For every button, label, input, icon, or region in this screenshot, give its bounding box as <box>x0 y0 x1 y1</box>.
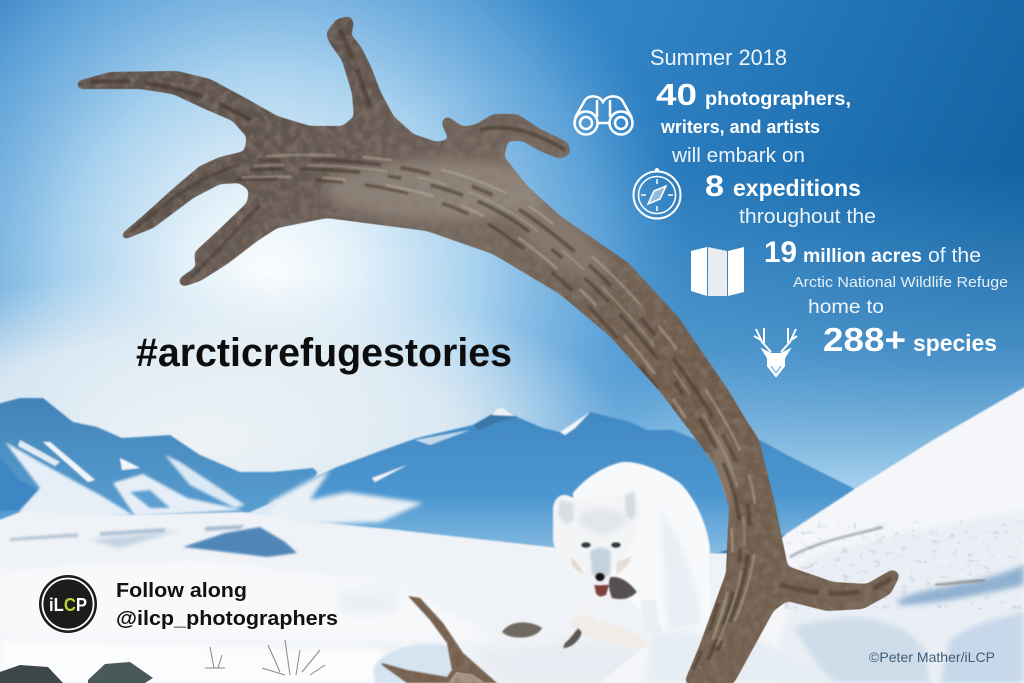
text: writers and artists: writers, and artists <box>660 117 820 137</box>
follow along text: @ilcp_photographers <box>116 608 338 630</box>
stat: 40 photographers: 40 <box>656 77 697 112</box>
stat: 19 million acres <box>764 236 981 269</box>
follow along text <box>116 580 338 630</box>
right snow slope <box>600 384 1024 683</box>
fox head <box>553 488 641 599</box>
icon: compass <box>634 168 680 218</box>
mountains on the left <box>0 398 340 522</box>
lower antler fragment <box>381 595 498 683</box>
stat: 8 expeditions <box>705 170 861 203</box>
stat: 40 photographers <box>656 77 851 112</box>
logo: iLCP badge: iLCP <box>49 595 87 615</box>
stat: 19 million acres: million acres <box>803 245 922 267</box>
follow along text: Follow along <box>116 580 247 602</box>
text: summer 2018: Summer 2018 <box>650 45 787 70</box>
text: throughout the: throughout the <box>739 206 876 228</box>
stat: 19 million acres: 19 <box>764 236 797 269</box>
arctic fox <box>502 462 711 648</box>
stat: 288+ species: species <box>913 330 997 356</box>
rocks and shrubs at the bottom <box>0 640 325 683</box>
stat: 40 photographers: photographers, <box>705 89 851 110</box>
stat: 8 expeditions: 8 <box>705 170 724 203</box>
stat: 8 expeditions: expeditions <box>733 175 861 201</box>
text: home to: home to <box>808 297 884 318</box>
logo: iLCP badge <box>39 575 97 633</box>
photo credit: ©Peter Mather/iLCP <box>869 649 995 665</box>
icon: folded map <box>691 247 744 296</box>
icon: binoculars <box>574 96 632 134</box>
stat: 288+ species: 288+ <box>823 321 906 358</box>
mountains in the centre <box>270 408 855 553</box>
snow field <box>0 512 1024 683</box>
text: refuge name: Arctic National Wildlife Refuge <box>793 275 1008 291</box>
icon: deer head with antlers <box>754 328 797 376</box>
hashtag heading: #arcticrefugestories <box>136 331 512 375</box>
stat: 19 million acres: of the <box>928 245 981 267</box>
text: will embark on: will embark on <box>671 145 805 167</box>
statistics text block <box>650 45 1008 358</box>
stat: 288+ species <box>823 321 997 358</box>
